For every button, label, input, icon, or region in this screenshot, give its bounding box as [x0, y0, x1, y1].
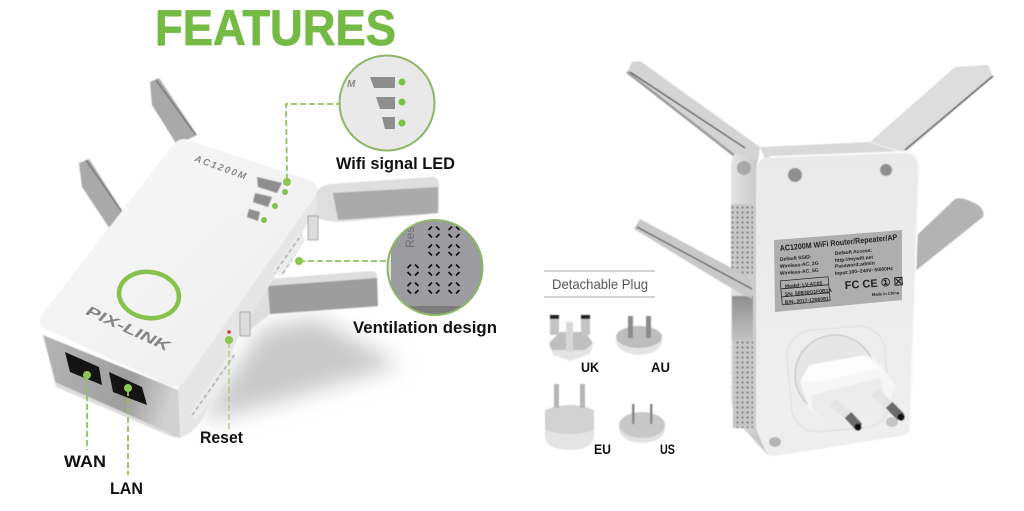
- label: WAN: WAN: [64, 452, 106, 471]
- title: FEATURES: [155, 0, 396, 56]
- callout lines: [87, 104, 388, 475]
- callout: wifi signal LED zoom circle: M: [347, 79, 356, 90]
- label: US: US: [660, 441, 675, 457]
- reset red LED: [227, 330, 231, 334]
- EU plug socket: [785, 324, 904, 434]
- antenna: far left: [79, 159, 123, 229]
- antenna: back left: [150, 78, 197, 145]
- antenna: upper right: [870, 65, 993, 153]
- rating label: Default Access:: [835, 248, 873, 257]
- panel: router front view: [40, 78, 439, 475]
- label: wifi signal LED: Wifi signal LED: [336, 154, 455, 173]
- signal bars: [247, 177, 282, 221]
- label: EU: EU: [594, 441, 611, 457]
- rating label: Wireless-AC_2G: [780, 261, 819, 270]
- router rear face: [756, 152, 919, 456]
- label: AU: AU: [651, 359, 670, 375]
- brand: PIX-LINK: PIX-LINK: [84, 302, 174, 355]
- label: UK: UK: [581, 359, 599, 375]
- router body: [40, 139, 318, 438]
- green power ring: [116, 268, 182, 322]
- rating label: Model: LV-AC05: [785, 281, 823, 290]
- rating label: [774, 230, 904, 312]
- antenna: upper left: [627, 61, 760, 162]
- plug panel rules: [544, 271, 655, 297]
- rating label: Made in China: [872, 290, 900, 297]
- router rear side: [731, 142, 908, 456]
- rating label: Default SSID:: [780, 254, 812, 263]
- callout: ventilation zoom circle: [385, 220, 485, 318]
- rating label: B/N: 2017-1206081: [785, 296, 829, 306]
- callout dots: [83, 178, 303, 392]
- plug: AU: [616, 316, 662, 355]
- WAN port: [65, 352, 102, 385]
- label: LAN: LAN: [110, 479, 143, 498]
- panel: detachable plug: [544, 271, 675, 457]
- plug panel heading: Detachable Plug: [552, 276, 648, 292]
- rating label: Password:admin: [835, 261, 875, 270]
- floor shadow: [200, 318, 400, 422]
- LAN port: [109, 372, 147, 405]
- panel: router rear view: [627, 61, 993, 456]
- plug: US: [619, 404, 665, 443]
- rating label: Input:100~240V~50/60Hz: [835, 266, 894, 277]
- rating label: Wireless-AC_5G: [780, 268, 819, 277]
- antenna: lower right: [914, 198, 983, 272]
- plug: EU: [545, 384, 594, 450]
- callout: ventilation zoom circle: Res: [403, 227, 417, 248]
- rating label: FC CE ① ☒: [844, 276, 904, 292]
- rating label: http://mywifi.net: [835, 255, 874, 264]
- rating label: SN: 56B30G1F0B1A: [785, 288, 833, 298]
- signal LEDs on router: [261, 189, 288, 223]
- label: reset: Reset: [200, 428, 243, 447]
- callout: wifi signal LED zoom circle: [340, 56, 434, 150]
- hinges: [240, 216, 318, 336]
- antenna: right upper: [310, 177, 439, 222]
- brand: AC1200M: AC1200M: [192, 153, 248, 183]
- label: ventilation design: Ventilation design: [353, 318, 497, 337]
- plug: UK: [549, 315, 593, 361]
- antenna: right lower: [250, 271, 378, 330]
- rating label: AC1200M WiFi Router/Repeater/AP: [779, 233, 898, 253]
- antenna: lower left: [634, 219, 752, 299]
